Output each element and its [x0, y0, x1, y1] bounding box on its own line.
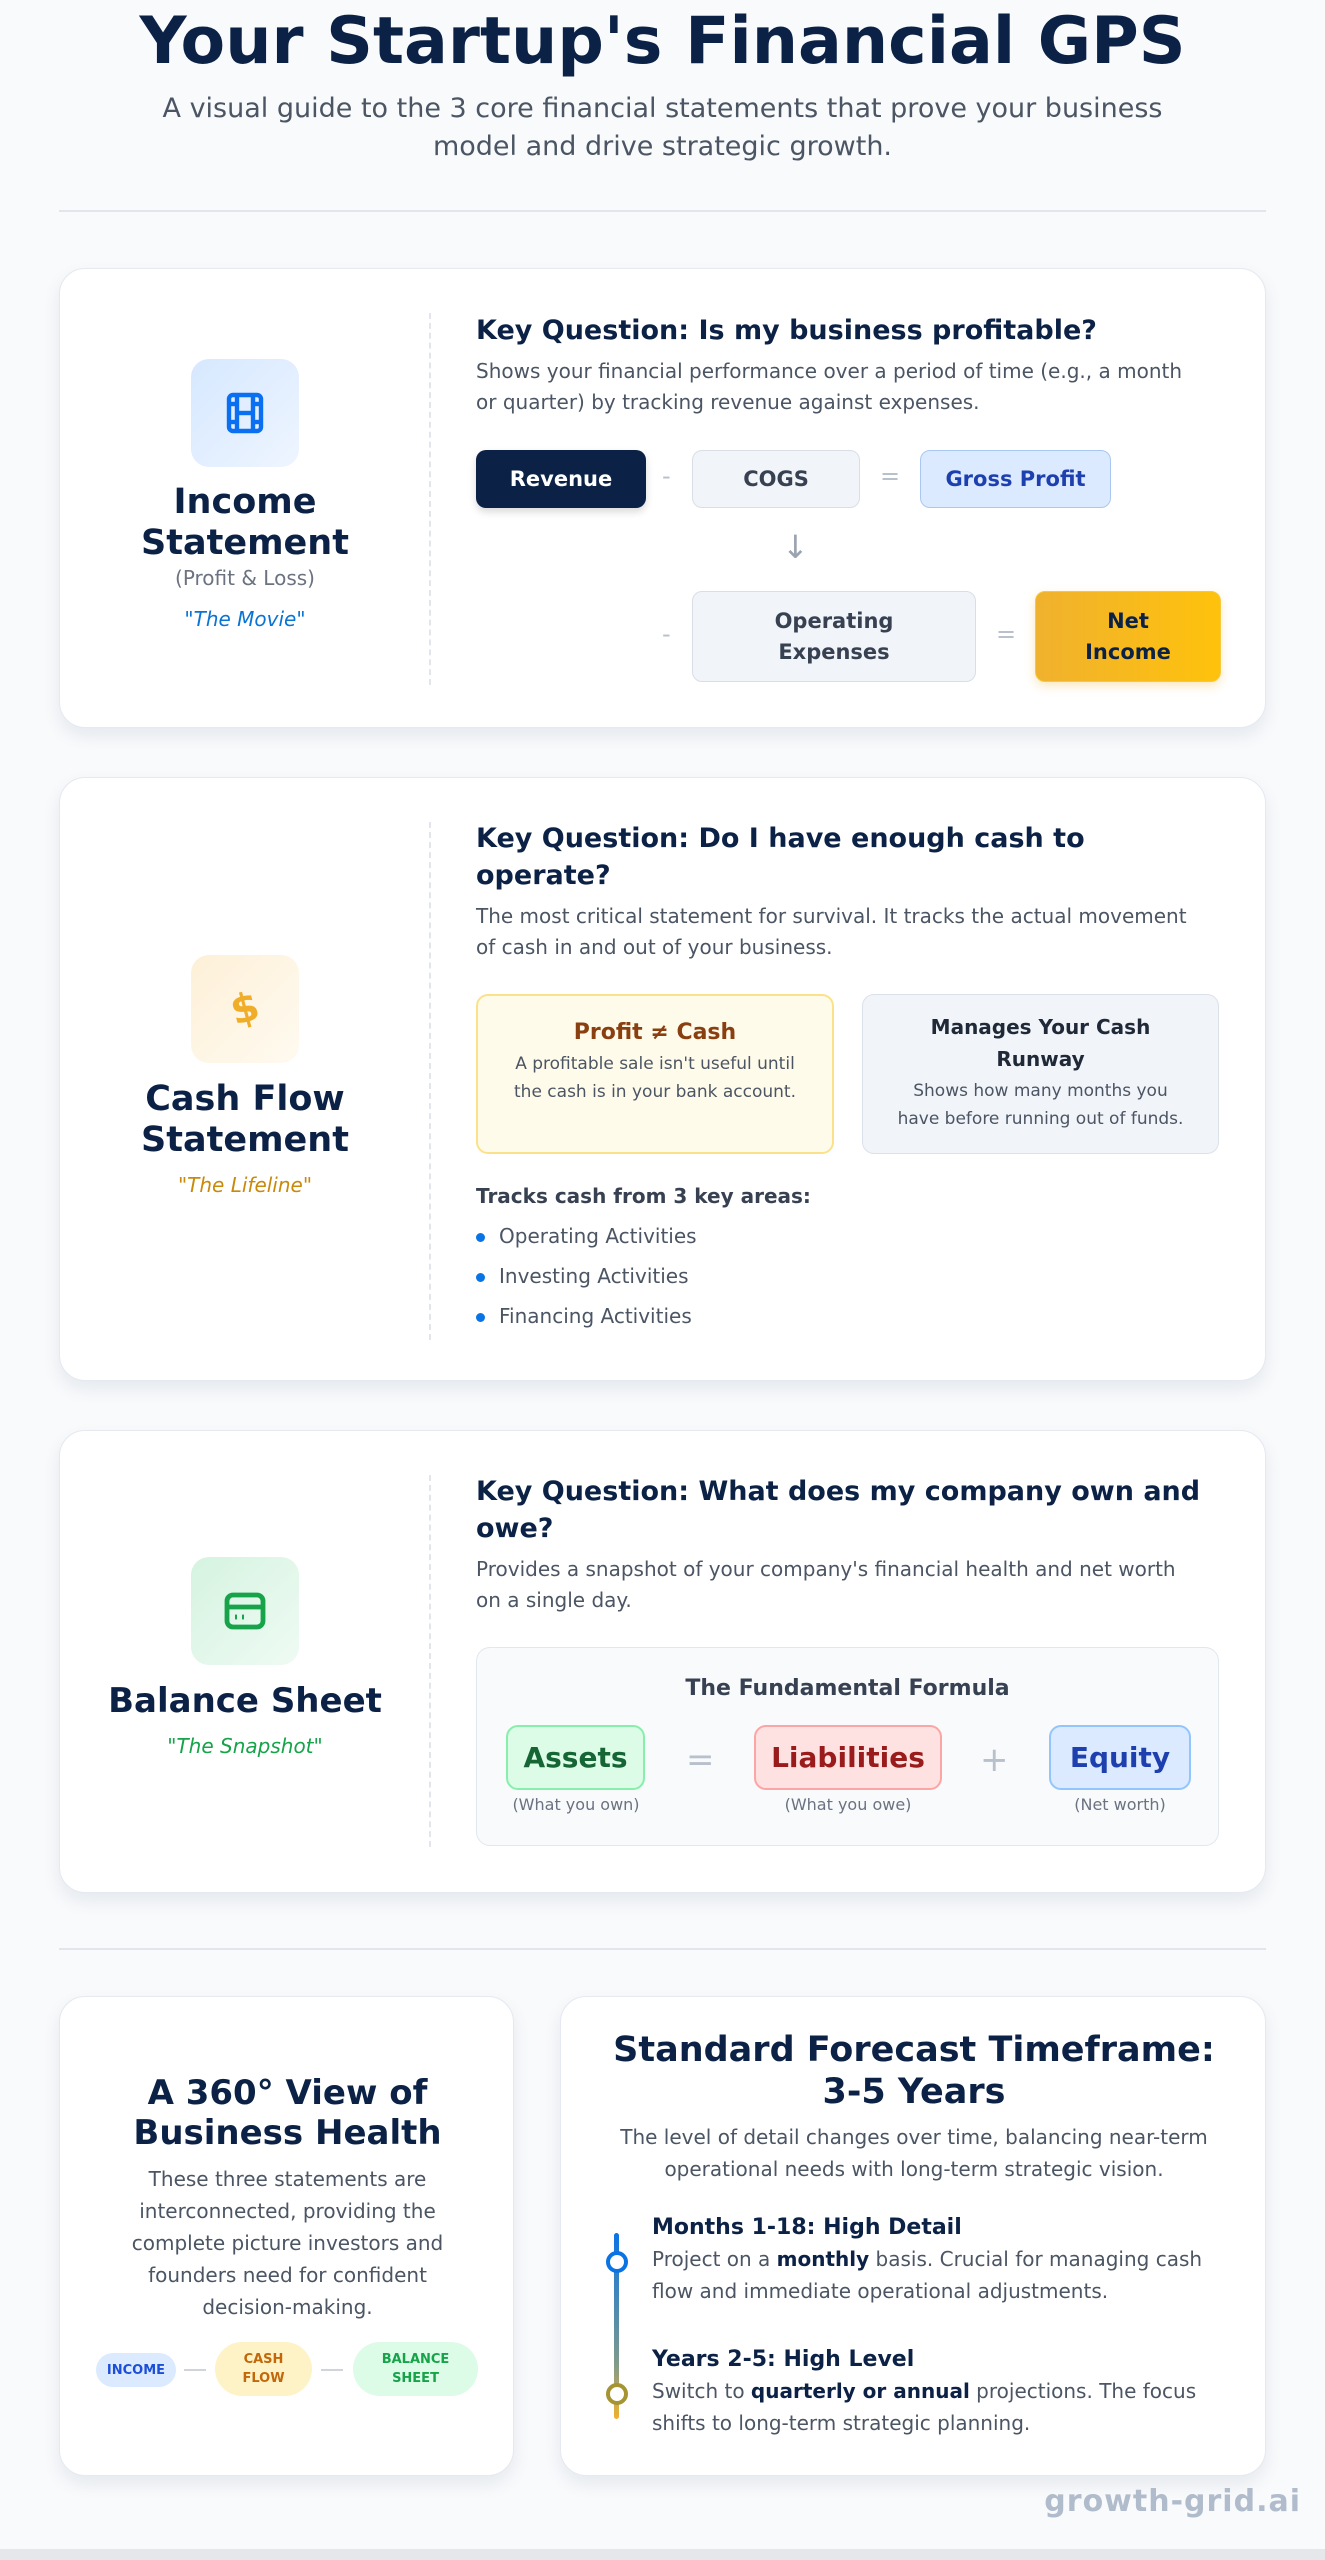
box: gross profit: Gross Profit	[945, 466, 1086, 490]
heading: A 360° View of	[148, 2073, 427, 2113]
description: Shows your financial performance over a period of time (e.g., a month	[476, 359, 1182, 383]
key question	[476, 1476, 1200, 1544]
text: =	[686, 1740, 714, 1780]
subheading: profit & loss: (Profit & Loss)	[175, 566, 315, 590]
callout: cash runway: Runway	[996, 1047, 1085, 1071]
description: on a single day.	[476, 1588, 632, 1612]
box: revenue	[476, 450, 646, 508]
box: operating expenses: Operating	[775, 608, 893, 632]
pills: SHEET	[392, 2371, 439, 2386]
callout: cash runway: have before running out of funds.	[898, 1109, 1183, 1129]
icon: film	[191, 359, 299, 467]
text: (What you owe)	[785, 1795, 911, 1814]
formula title: The Fundamental Formula	[685, 1676, 1010, 1701]
description: or quarter) by tracking revenue against expenses.	[476, 390, 980, 414]
flow diagram: -	[662, 620, 671, 648]
formula: assets	[506, 1725, 645, 1790]
formula: liabilities: Liabilities	[771, 1741, 925, 1774]
formula: assets: Assets	[523, 1741, 628, 1774]
box: revenue: Revenue	[510, 466, 612, 490]
formula: equity: Equity	[1070, 1741, 1170, 1774]
heading	[613, 2030, 1215, 2112]
heading: Standard Forecast Timeframe:	[613, 2030, 1215, 2070]
key question: Key Question: Do I have enough cash to	[476, 823, 1085, 854]
list: key areas: Investing Activities	[499, 1264, 689, 1288]
text: +	[980, 1740, 1008, 1780]
key question: Key Question: Is my business profitable?	[476, 315, 1097, 346]
heading: cash flow statement: Cash Flow Statement	[141, 1079, 349, 1160]
pills: FLOW	[242, 2371, 285, 2386]
description	[476, 904, 1187, 959]
step: months 1-18	[652, 2215, 1202, 2303]
heading	[133, 2073, 442, 2153]
subtitle: A visual guide to the 3 core financial statements that prove your business model and drive strategic growth.	[163, 93, 1162, 162]
panel: forecast timeframe	[560, 1996, 1266, 2476]
title: Your Startup's Financial GPS	[139, 4, 1186, 79]
description: of cash in and out of your business.	[476, 935, 833, 959]
icon: dollar	[191, 955, 299, 1063]
list: key areas	[476, 1184, 811, 1328]
panel: income statement	[59, 268, 1266, 728]
pills	[96, 2342, 478, 2396]
watermark: growth-grid.ai	[1044, 2484, 1301, 2519]
box: operating expenses: Expenses	[778, 640, 890, 664]
pills: INCOME	[107, 2362, 165, 2378]
list: key areas: Financing Activities	[499, 1304, 692, 1328]
tagline: the lifeline: "The Lifeline"	[178, 1173, 312, 1197]
flow diagram: =	[996, 620, 1016, 648]
text: (Net worth)	[1074, 1795, 1166, 1814]
callout: profit not cash: A profitable sale isn't useful until	[515, 1054, 795, 1074]
callout: profit not cash: Profit ≠ Cash	[574, 1020, 736, 1045]
callout: profit not cash: the cash is in your bank account.	[514, 1082, 796, 1102]
flow diagram: -	[662, 462, 671, 490]
heading: Business Health	[133, 2113, 442, 2153]
step: years 2-5: Years 2-5: High Level	[652, 2347, 914, 2372]
flow diagram	[473, 450, 1226, 692]
description	[476, 359, 1182, 414]
step: years 2-5: Switch to quarterly or annual projections. The focus shifts to long-term strategic planning.	[652, 2379, 1196, 2435]
key question: operate?	[476, 860, 611, 891]
step: years 2-5	[652, 2347, 1196, 2435]
formula box	[476, 1647, 1219, 1846]
heading: income statement: Income Statement	[141, 482, 349, 563]
panel: cash flow statement	[59, 777, 1266, 1381]
list: key areas: Operating Activities	[499, 1224, 697, 1248]
description: Provides a snapshot of your company's financial health and net worth	[476, 1557, 1176, 1581]
description: The level of detail changes over time, balancing near-term operational needs with long-term strategic vision.	[620, 2125, 1208, 2181]
box: net income	[1035, 591, 1221, 682]
box: net income: Net	[1107, 608, 1149, 632]
heading: balance sheet: Balance Sheet	[108, 1681, 382, 1721]
timeline	[606, 2233, 628, 2419]
icon: card	[191, 1557, 299, 1665]
key question: owe?	[476, 1513, 553, 1544]
heading: 3-5 Years	[822, 2072, 1006, 2112]
box: operating expenses	[692, 591, 976, 682]
panel: balance sheet	[59, 1430, 1266, 1893]
key question	[476, 823, 1085, 891]
formula: equity	[1049, 1725, 1191, 1790]
pills: BALANCE	[382, 2352, 449, 2367]
box: gross profit	[920, 450, 1111, 508]
box: cogs: COGS	[743, 466, 809, 490]
arrow: down: ↓	[782, 528, 809, 566]
formula: liabilities	[754, 1725, 942, 1790]
tagline: the movie: "The Movie"	[184, 607, 306, 631]
box: net income: Income	[1085, 640, 1171, 664]
text: These three statements are interconnected, providing the complete picture investors and founders need for confident decision-making.	[132, 2167, 443, 2319]
callout: cash runway	[862, 994, 1219, 1154]
panel: 360 view	[59, 1996, 514, 2476]
text: (What you own)	[512, 1795, 640, 1814]
list: key areas: Tracks cash from 3 key areas:	[476, 1184, 811, 1208]
flow diagram: =	[880, 462, 900, 490]
icon: dollar: $	[226, 983, 264, 1035]
pills: CASH	[244, 2352, 283, 2367]
description: The most critical statement for survival. It tracks the actual movement	[476, 904, 1187, 928]
step: months 1-18: Project on a monthly basis. Crucial for managing cash flow and immediate operational adjustments.	[652, 2247, 1202, 2303]
tagline: the snapshot: "The Snapshot"	[167, 1734, 323, 1758]
callout: cash runway: Manages Your Cash	[931, 1015, 1150, 1039]
description	[476, 1557, 1176, 1612]
key question: Key Question: What does my company own and	[476, 1476, 1200, 1507]
box: cogs	[692, 450, 860, 508]
callout: cash runway: Shows how many months you	[913, 1081, 1168, 1101]
callout: profit not cash	[476, 994, 834, 1154]
step: months 1-18: Months 1-18: High Detail	[652, 2215, 962, 2240]
